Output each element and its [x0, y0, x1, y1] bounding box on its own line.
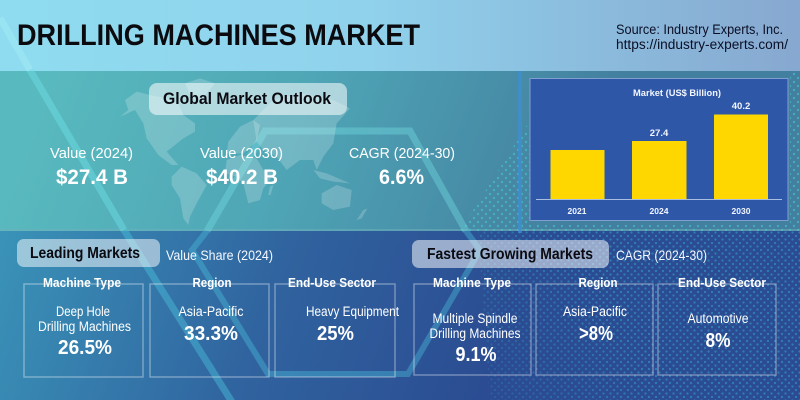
header: source: Source: Industry Experts, Inc.: [616, 22, 783, 37]
card: end-use sector: [658, 275, 776, 375]
header: source: [616, 22, 788, 52]
heading: leading markets: [17, 239, 160, 267]
card: region: Asia-Pacific: [178, 304, 244, 319]
stat: CAGR: [349, 145, 455, 189]
chart title: Market (US$ Billion): [633, 88, 721, 99]
bar values: [650, 101, 750, 139]
card: machine type: Multiple Spindle: [432, 311, 518, 326]
card: end-use sector: 8%: [706, 330, 731, 352]
heading: global market outlook: Global Market Outlook: [163, 89, 332, 108]
stat: value 2024: Value (2024): [50, 145, 133, 162]
stat: CAGR: CAGR (2024-30): [349, 145, 455, 162]
card: end-use sector: Automotive: [688, 311, 748, 326]
heading: leading markets: Leading Markets: [30, 245, 140, 262]
panel: global market outlook: [50, 83, 455, 189]
panel: fastest growing markets: [412, 240, 776, 375]
stat: value 2030: [200, 145, 283, 189]
card: machine type: 9.1%: [456, 344, 497, 366]
card: machine type: Machine Type: [433, 275, 511, 290]
card: machine type: Drilling Machines: [38, 319, 131, 334]
heading: fastest growing markets: Fastest Growing Markets: [427, 246, 593, 263]
card: machine type: [414, 275, 531, 375]
stat: value 2030: $40.2 B: [206, 166, 278, 189]
card: machine type: Machine Type: [43, 275, 121, 290]
card: region: Asia-Pacific: [563, 304, 627, 319]
card: end-use sector: [275, 275, 399, 377]
axis labels: 2030: [732, 206, 751, 216]
card: machine type: 26.5%: [58, 337, 112, 359]
card: region: Region: [578, 275, 618, 290]
card: region: >8%: [579, 323, 613, 345]
card: region: [150, 275, 269, 377]
card: region: Region: [192, 275, 232, 290]
card: end-use sector: End-Use Sector: [288, 275, 376, 290]
subheading: value share: Value Share (2024): [166, 247, 273, 263]
card: machine type: [24, 275, 143, 377]
heading: global market outlook: [149, 83, 347, 115]
stat: value 2030: Value (2030): [200, 145, 283, 162]
card: end-use sector: 25%: [317, 323, 354, 345]
card: end-use sector: End-Use Sector: [678, 275, 766, 290]
bar chart: market US$ billion: [530, 78, 788, 220]
card: end-use sector: Heavy Equipment: [306, 304, 399, 319]
stat: value 2024: [50, 145, 133, 189]
card: region: [536, 275, 653, 375]
axis labels: 2021: [568, 206, 587, 216]
bar values: 27.4: [650, 128, 669, 139]
stat: value 2024: $27.4 B: [56, 166, 128, 189]
world map: [120, 78, 367, 225]
axis labels: [568, 206, 751, 216]
card: region: 33.3%: [184, 323, 238, 345]
bars: [550, 114, 768, 200]
stat: CAGR: 6.6%: [379, 166, 424, 189]
card: machine type: Deep Hole: [56, 304, 110, 319]
panel: leading markets: [17, 239, 399, 377]
axis labels: 2024: [650, 206, 669, 216]
heading: fastest growing markets: [412, 240, 609, 268]
bar values: 40.2: [732, 101, 750, 112]
card: machine type: Drilling Machines: [430, 326, 521, 341]
hexagon line decoration: [0, 18, 480, 400]
subheading: CAGR: CAGR (2024-30): [616, 247, 707, 263]
header: source: https://industry-experts.com/: [616, 37, 788, 52]
header: title: DRILLING MACHINES MARKET: [17, 19, 420, 52]
